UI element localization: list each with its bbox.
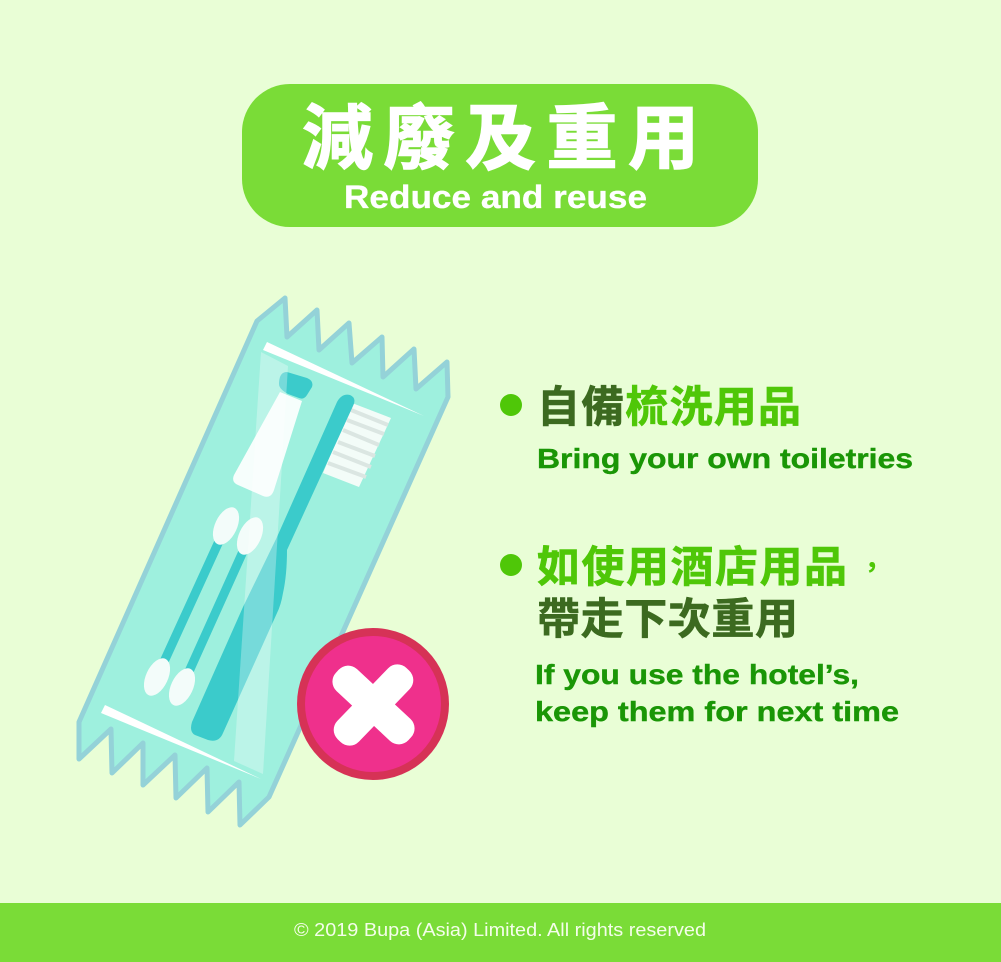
packet body — [79, 298, 448, 825]
copyright text: © 2019 Bupa (Asia) Limited. All rights reserved — [294, 920, 706, 940]
cotton swab sticks — [157, 526, 250, 687]
toothpaste tube — [233, 392, 302, 497]
tip 2 Chinese heading line 2: 帶走下次重用 — [537, 596, 799, 644]
toothbrush bristles — [323, 403, 391, 487]
illustration: toiletries packet with cross — [79, 298, 449, 825]
tip 1 English text: Bring your own toiletries — [537, 443, 913, 474]
title banner — [242, 84, 758, 227]
tip 1 — [500, 384, 913, 474]
cross badge — [297, 628, 449, 780]
bullet 1 — [500, 394, 522, 416]
tip 2 English line 1: If you use the hotel’s, — [535, 659, 859, 690]
tip 2 comma: ， — [858, 552, 886, 583]
plastic reflection highlight — [234, 352, 288, 774]
white seal strip top — [263, 342, 424, 416]
title: Chinese heading: 減廢及重用 — [302, 100, 710, 179]
footer bar — [0, 903, 1001, 962]
cotton swab tips — [139, 503, 268, 710]
bullet 2 — [500, 554, 522, 576]
tip 1 Chinese heading: 自備梳洗用品 — [537, 384, 802, 432]
tip 2 Chinese heading line 1: 如使用酒店用品 — [537, 544, 848, 592]
white seal strip bottom — [101, 705, 261, 779]
subtitle: English heading: Reduce and reuse — [344, 179, 647, 215]
toothpaste cap — [279, 372, 312, 399]
tip 2 English line 2: keep them for next time — [535, 696, 899, 727]
toothbrush handle — [191, 395, 354, 741]
tip 2 — [500, 544, 899, 727]
